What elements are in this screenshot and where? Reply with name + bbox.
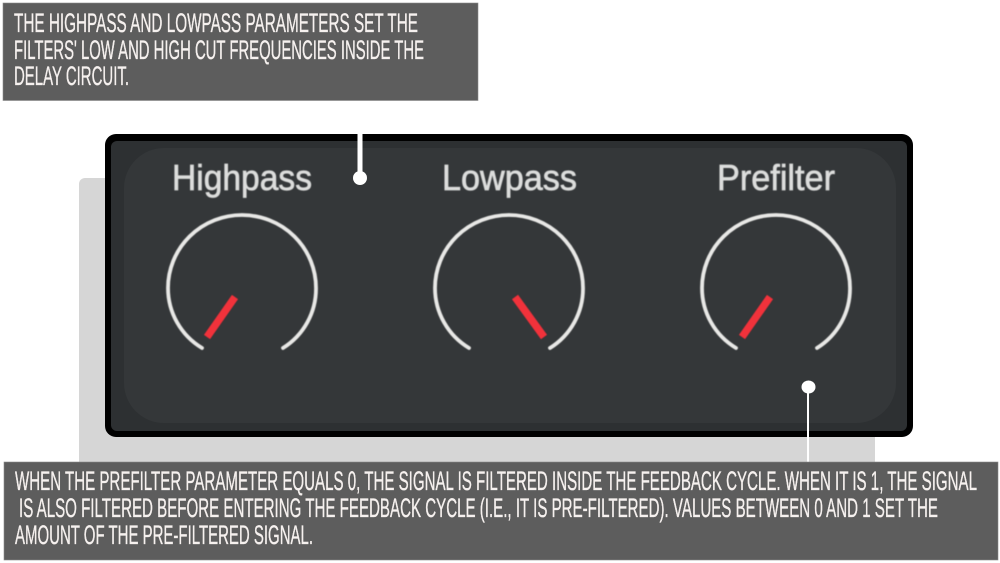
needle: prefilter (742, 297, 770, 337)
callout pointer: prefilter (802, 380, 816, 463)
callout: prefilter text box: AMOUNT OF THE PRE-FILTERED SIGNAL. (15, 520, 313, 550)
label: lowpass: Lowpass (442, 157, 577, 198)
dial arc: lowpass (435, 215, 583, 348)
dial arc: highpass (168, 215, 316, 348)
callout: highpass and lowpass text box: THE HIGHPASS AND LOWPASS PARAMETERS SET THE (14, 8, 418, 38)
knob: prefilter (702, 157, 850, 348)
needle: highpass (207, 297, 235, 337)
drop shadow behind panel (79, 178, 875, 468)
callout: highpass and lowpass text box: FILTERS' LOW AND HIGH CUT FREQUENCIES INSIDE THE (14, 35, 424, 65)
knob: lowpass (435, 157, 583, 348)
dial arc: prefilter (702, 215, 850, 348)
device panel (105, 134, 913, 437)
label: prefilter: Prefilter (717, 157, 835, 198)
label: highpass: Highpass (172, 157, 312, 198)
callout: prefilter text box (4, 462, 998, 560)
callout pointer: highpass and lowpass (353, 100, 367, 185)
callout: highpass and lowpass text box (3, 3, 478, 100)
callout: highpass and lowpass text box: DELAY CIRCUIT. (14, 61, 129, 91)
needle: lowpass (515, 297, 544, 337)
knob: highpass (168, 157, 316, 348)
